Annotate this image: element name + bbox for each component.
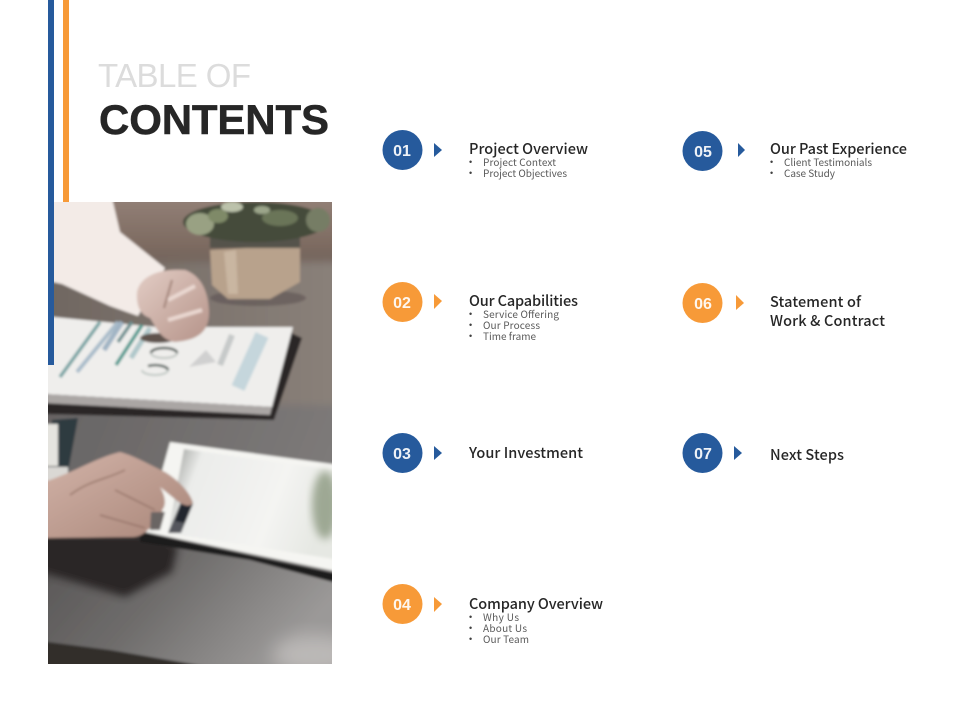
photo detail: notebook at left edge: [44, 418, 78, 481]
bullets 02: [469, 306, 559, 343]
orange vertical accent bar: [63, 0, 69, 202]
arrow 03: [434, 446, 442, 460]
bullets 01: •: [469, 168, 472, 178]
bullets 01: •: [469, 157, 472, 167]
bullets 01: [469, 154, 567, 180]
bullets 01: Project Objectives: [483, 165, 567, 180]
bullets 02: Time frame: [483, 328, 536, 343]
item 01: Project Overview: [382, 130, 588, 180]
photo detail: bottom desk edge: [48, 641, 198, 664]
badge 07: [682, 433, 722, 473]
bullets 04: •: [469, 634, 472, 644]
photo detail: hand holding pen: [137, 270, 209, 343]
heading 02: Our Capabilities: [469, 290, 578, 311]
badge 01: [382, 130, 422, 170]
badge 06: [682, 283, 722, 323]
badge 01: 01: [393, 143, 411, 160]
bullets 01: Project Context: [483, 154, 556, 169]
badge 07: 07: [694, 446, 712, 463]
photo detail: report chart bars: [60, 322, 262, 388]
badge 06: 06: [694, 296, 712, 313]
bullets 02: Service Offering: [483, 306, 559, 321]
bullets 04: •: [469, 612, 472, 622]
photo: hands working with report and tablet on desk: [48, 202, 332, 664]
bullets 04: [469, 609, 529, 646]
bullets 05: •: [770, 157, 773, 167]
heading 01: Project Overview: [469, 138, 588, 159]
item 05: Our Past Experience: [682, 131, 907, 180]
bullets 02: •: [469, 309, 472, 319]
badge 02: [382, 282, 422, 322]
bullets 05: [770, 154, 872, 180]
photo detail: plant leaves: [183, 202, 330, 242]
title line: CONTENTS: CONTENTS: [99, 96, 329, 143]
photo detail: tablet body: [140, 442, 340, 584]
arrow 01: [434, 143, 442, 157]
bullets 05: Case Study: [784, 165, 836, 180]
arrow 02: [434, 294, 442, 309]
bullets 02: •: [469, 320, 472, 330]
photo detail: hand reflection on desk: [40, 534, 178, 597]
item 02: Our Capabilities: [382, 282, 578, 343]
bullets 02: •: [469, 331, 472, 341]
item 03: Your Investment: [382, 433, 583, 473]
item 07: Next Steps: [682, 433, 844, 473]
item 04: Company Overview: [382, 584, 603, 646]
bullets 05: Client Testimonials: [784, 154, 872, 169]
arrow 07: [734, 446, 742, 460]
photo area: upper desk and wall: [40, 190, 340, 670]
photo detail: highlight at lower right: [270, 630, 332, 664]
item 06: Statement of Work & Contract: [682, 283, 885, 331]
photo detail: clipboard shadow: [44, 330, 302, 420]
heading 05: Our Past Experience: [770, 138, 907, 159]
badge 03: 03: [393, 446, 411, 463]
heading 03: Your Investment: [468, 442, 583, 463]
bullets 04: Why Us: [483, 609, 519, 624]
title: [98, 57, 329, 143]
bullets 02: Our Process: [483, 317, 540, 332]
badge 04: [382, 584, 422, 624]
badge 05: [682, 131, 722, 171]
bullets 05: •: [770, 168, 773, 178]
photo detail: hand on tablet: [44, 452, 193, 538]
heading 06: Work & Contract: [770, 310, 885, 331]
heading 04: Company Overview: [469, 593, 603, 614]
arrow 04: [434, 597, 442, 612]
badge 03: [382, 433, 422, 473]
photo detail: plant pot: [210, 237, 306, 306]
title line: TABLE OF: TABLE OF: [98, 57, 251, 94]
heading 07: Next Steps: [770, 444, 844, 465]
badge 02: 02: [393, 295, 411, 312]
arrow 05: [738, 143, 745, 157]
bullets 04: •: [469, 623, 472, 633]
arrow 06: [736, 295, 744, 310]
heading 06: Statement of: [770, 291, 862, 312]
photo detail: report page: [44, 316, 293, 407]
badge 04: 04: [393, 597, 411, 614]
photo detail: sleeve: [44, 198, 165, 316]
heading 06: [770, 291, 885, 331]
badge 05: 05: [694, 144, 712, 161]
blue vertical accent bar: [48, 0, 54, 365]
bullets 04: Our Team: [483, 631, 529, 646]
bullets 04: About Us: [483, 620, 527, 635]
